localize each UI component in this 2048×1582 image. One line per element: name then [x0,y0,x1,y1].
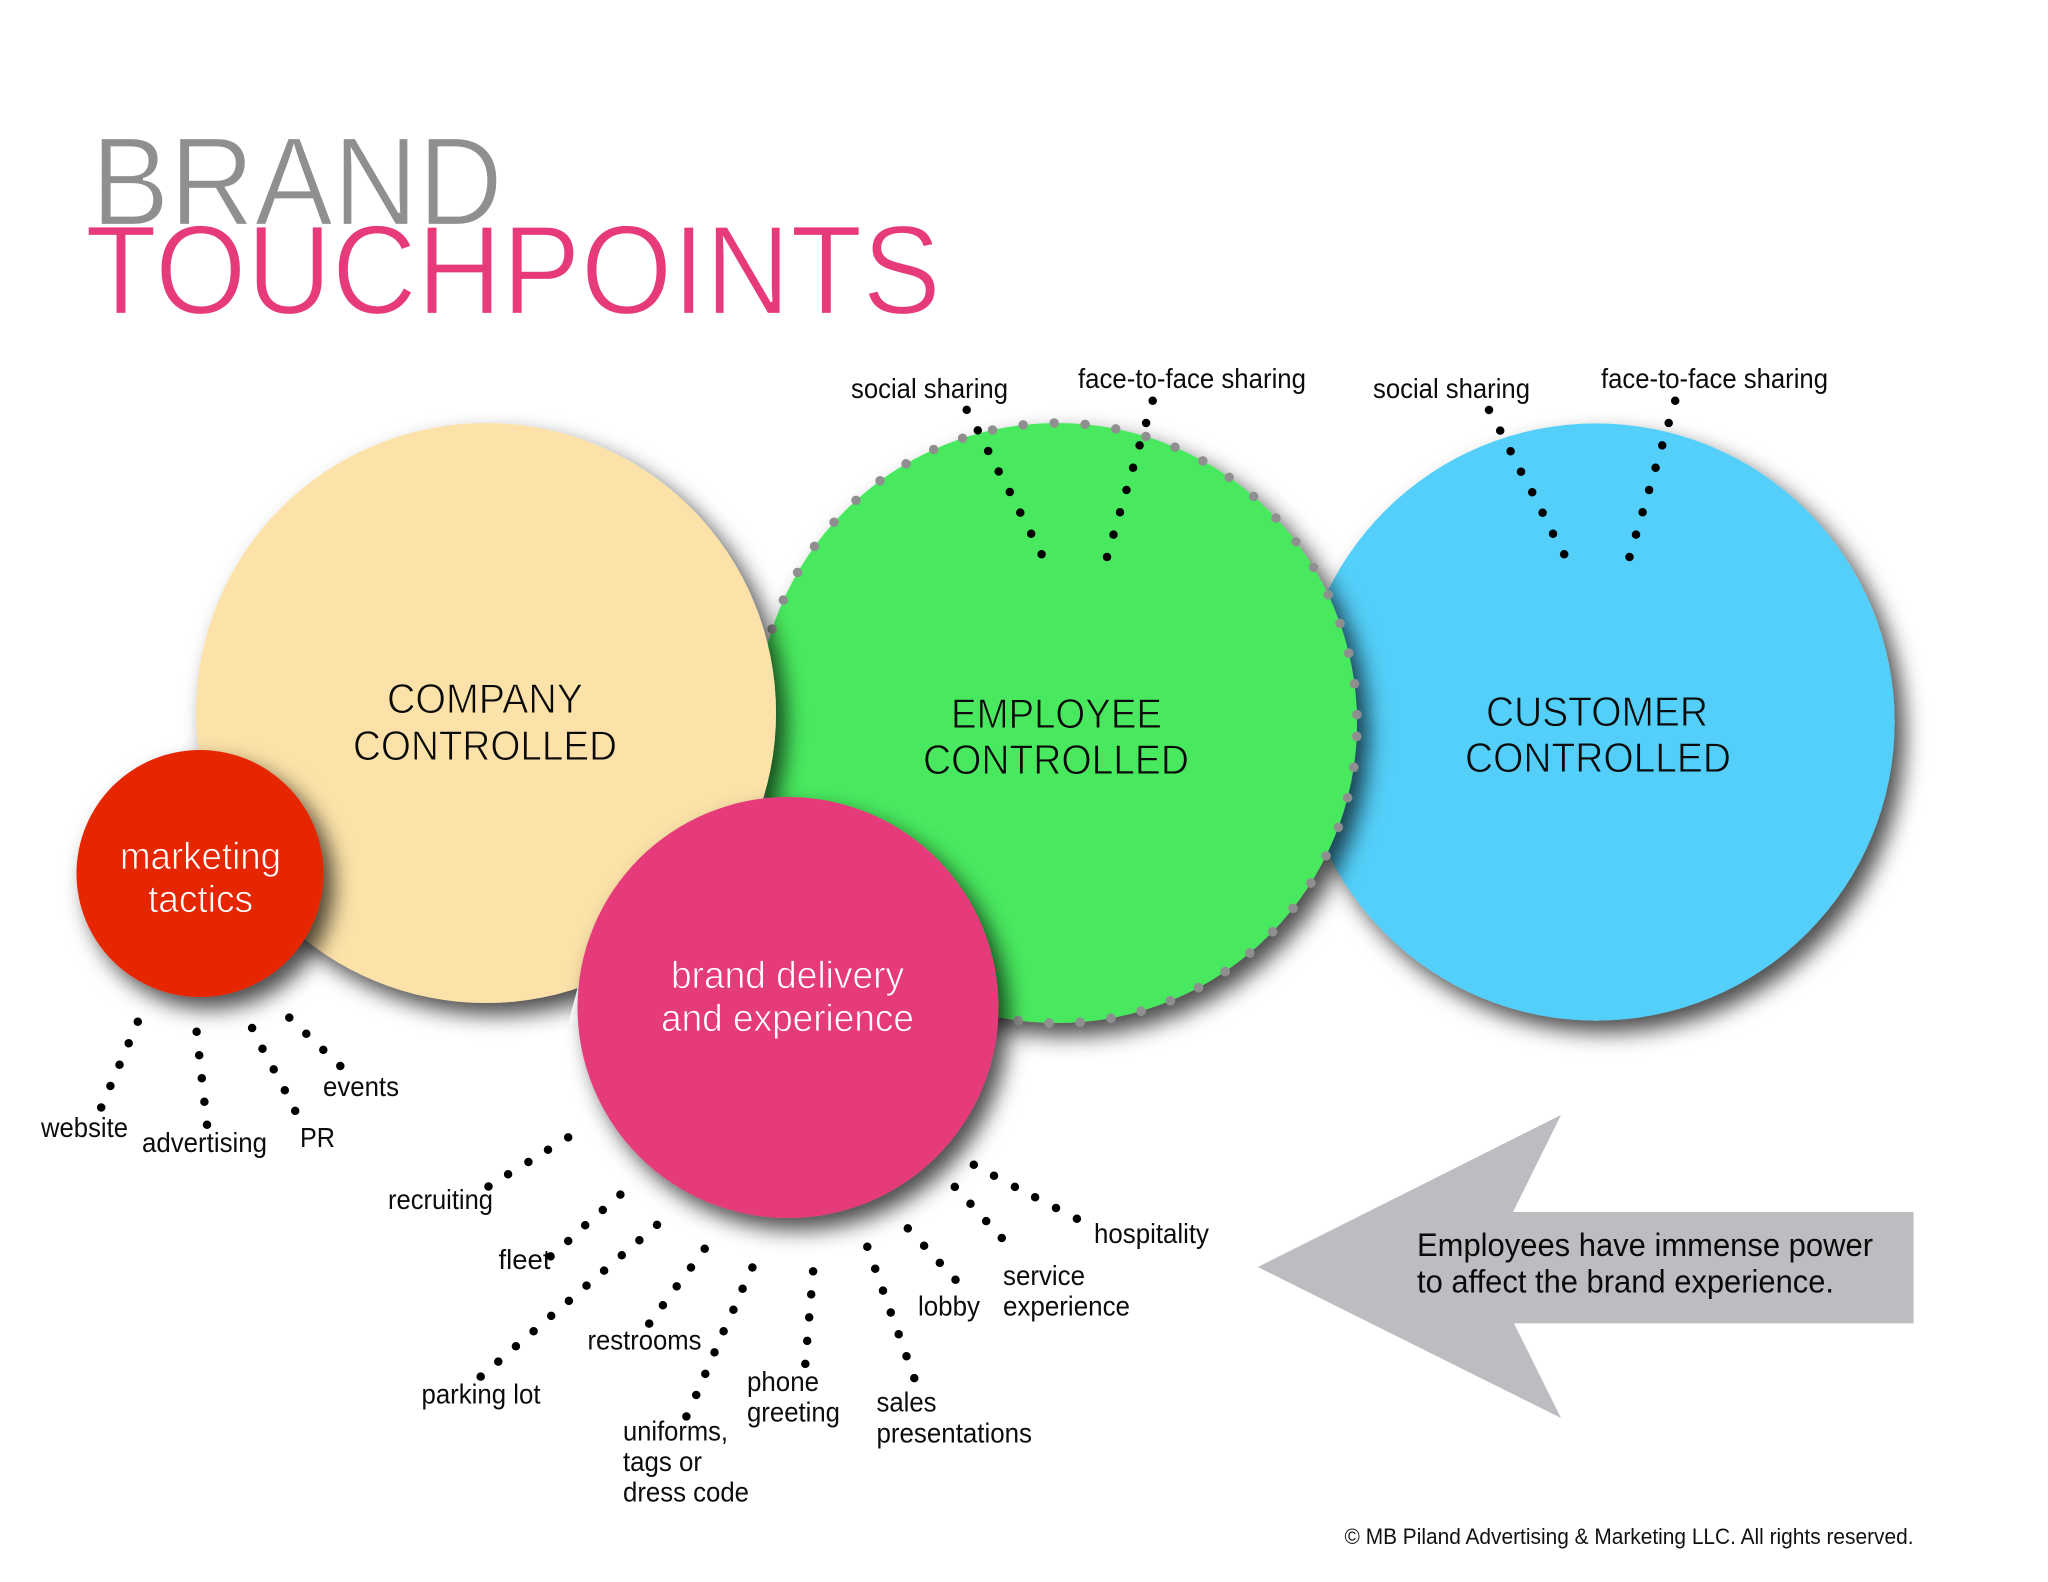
brand delivery label [661,955,914,1040]
company controlled label: CONTROLLED [353,722,617,769]
experience: hospitality [974,1165,1209,1249]
arrow callout [1258,1115,1914,1418]
experience: recruiting: recruiting [388,1184,493,1215]
experience: phone greeting: greeting [747,1396,840,1428]
customer controlled label [1465,688,1731,781]
tactic: events: events [323,1071,399,1102]
marketing tactics label [120,836,281,921]
experience: sales presentations [867,1247,1032,1448]
customer: face-to-face sharing: face-to-face sharing [1601,363,1828,394]
employee: face-to-face sharing [1078,363,1306,557]
experience: recruiting [388,1137,568,1215]
experience: uniforms, tags or dress code [623,1268,752,1508]
customer controlled label: CONTROLLED [1465,734,1731,781]
experience: service experience [955,1187,1130,1322]
tactic: website: website [40,1112,128,1143]
arrow shape [1258,1115,1914,1418]
marketing tactics label: tactics [148,879,253,921]
copyright: © MB Piland Advertising & Marketing LLC. All rights reserved. [1344,1524,1914,1549]
tactic: advertising [142,1032,267,1158]
customer: social sharing: social sharing [1373,373,1530,404]
tactic: events [289,1018,399,1102]
experience: parking lot [422,1225,657,1410]
experience: phone greeting: phone [747,1366,819,1397]
arrow message: to affect the brand experience. [1417,1264,1834,1300]
experience: uniforms, tags or dress code: tags or [623,1446,702,1477]
circle: marketing tactics [76,750,324,997]
experience: fleet: fleet [498,1244,551,1275]
experience: parking lot: parking lot [422,1378,541,1410]
experience: hospitality: hospitality [1094,1218,1209,1249]
experience: fleet [498,1195,620,1275]
employee: social sharing [851,373,1042,554]
employee: face-to-face sharing: face-to-face sharing [1078,363,1306,394]
arrow message: Employees have immense power [1417,1227,1873,1263]
circle: customer controlled [1297,423,1895,1021]
employee: social sharing: social sharing [851,373,1008,404]
experience: sales presentations: sales [876,1386,936,1418]
company controlled label: COMPANY [387,675,583,722]
tactic: website [40,1022,138,1143]
customer: face-to-face sharing [1601,363,1828,557]
employee controlled label: EMPLOYEE [951,690,1162,737]
tactic: PR [252,1028,335,1153]
experience: lobby: lobby [918,1290,980,1322]
brand delivery label: and experience [661,998,914,1040]
title line: BRAND: BRAND [91,111,503,252]
experience: phone greeting [747,1271,840,1428]
experience: service experience: service [1003,1260,1085,1291]
arrow message [1417,1227,1873,1300]
customer controlled label: CUSTOMER [1486,688,1708,735]
circle: brand delivery and experience [568,797,998,1218]
experience: uniforms, tags or dress code: dress code [623,1476,749,1508]
employee controlled label [923,690,1189,783]
circle: employee controlled [757,423,1357,1023]
tactic: PR: PR [300,1122,335,1153]
experience: restrooms: restrooms [588,1324,702,1356]
tactic: advertising: advertising [142,1127,267,1158]
title line: TOUCHPOINTS: TOUCHPOINTS [85,199,941,341]
brand delivery label: brand delivery [671,955,904,997]
experience: service experience: experience [1003,1290,1130,1322]
circle: company controlled [196,423,776,1003]
company controlled label [353,675,617,769]
marketing tactics label: marketing [120,836,281,878]
experience: uniforms, tags or dress code: uniforms, [623,1416,728,1446]
experience: sales presentations: presentations [876,1418,1032,1448]
experience: restrooms [588,1249,705,1356]
customer: social sharing [1373,373,1564,554]
title [85,111,941,341]
experience: lobby [908,1228,980,1322]
employee controlled label: CONTROLLED [923,736,1189,783]
